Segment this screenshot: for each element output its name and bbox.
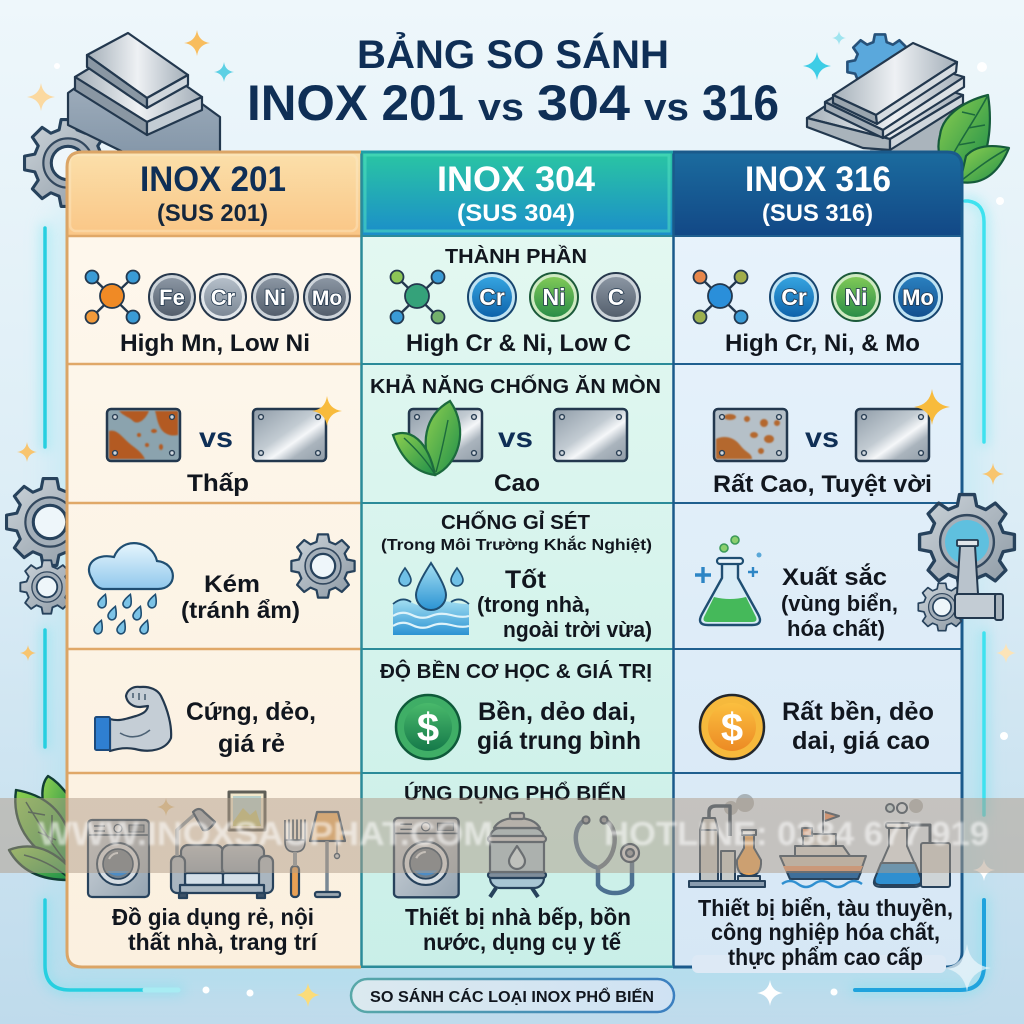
applications text xyxy=(405,904,631,955)
row heading: rust resistance: CHỐNG GỈ SÉT xyxy=(441,510,590,534)
comparison table xyxy=(66,151,963,968)
title: vs xyxy=(478,87,524,129)
elements: Cr Ni Mo: Ni xyxy=(844,284,868,310)
elements: Cr Ni C: C xyxy=(608,284,624,310)
decoration: top-right gear, ingots and leaves xyxy=(807,34,1009,183)
strength text: Bền, dẻo dai, xyxy=(478,698,636,726)
applications text backing and lines: công nghiệp hóa chất, xyxy=(711,919,940,945)
rust rating: Kém xyxy=(204,571,260,598)
row heading: strength and value: ĐỘ BỀN CƠ HỌC & GIÁ TRỊ xyxy=(380,659,652,683)
elements: Fe Cr Ni Mo: Cr xyxy=(211,285,236,310)
corrosion rating: Cao xyxy=(494,470,540,497)
title: vs xyxy=(644,87,689,129)
strength text: giá trung bình xyxy=(477,727,641,755)
icon: green dollar coin xyxy=(396,695,460,759)
row heading: common applications: ỨNG DỤNG PHỔ BIẾN xyxy=(404,781,626,805)
rust rating: (tránh ẩm) xyxy=(181,597,300,623)
strength text xyxy=(477,698,641,755)
composition text: High Cr, Ni, & Mo xyxy=(725,330,920,357)
corner sparkle bottom-right xyxy=(943,944,991,992)
title xyxy=(247,31,779,131)
header: INOX 304 xyxy=(437,160,596,227)
elements: Cr Ni C: Cr xyxy=(479,284,505,310)
strength text: dai, giá cao xyxy=(792,727,930,755)
icon: green dollar coin: $ xyxy=(417,706,439,750)
elements: Cr Ni Mo: Mo xyxy=(902,285,934,310)
header: INOX 316: (SUS 316) xyxy=(762,200,873,227)
rust rating xyxy=(781,563,898,641)
icon: molecule xyxy=(86,270,140,324)
applications text: Thiết bị nhà bếp, bồn xyxy=(405,904,631,930)
applications text backing and lines: Thiết bị biển, tàu thuyền, xyxy=(698,895,953,921)
title: INOX 201 xyxy=(247,75,464,131)
strength text xyxy=(782,698,934,755)
icon: orange dollar coin: $ xyxy=(721,706,743,750)
neon frame behind the table xyxy=(45,201,984,990)
applications text backing and lines xyxy=(692,895,953,973)
strength text: giá rẻ xyxy=(218,730,285,758)
watermark band: HOTLINE: 0384 677 919 xyxy=(604,815,989,852)
header: INOX 304: (SUS 304) xyxy=(457,200,575,227)
applications text: nước, dụng cụ y tế xyxy=(423,929,621,955)
icon: rusted plate vs polished plate: vs xyxy=(199,422,233,453)
header: INOX 201: INOX 201 xyxy=(140,160,286,199)
title: BẢNG SO SÁNH xyxy=(357,31,669,77)
icon: water drops and waves xyxy=(393,563,469,635)
icon: leaf on plate vs polished plate xyxy=(393,401,627,475)
watermark band xyxy=(0,798,1024,873)
decoration: left side gears xyxy=(7,479,93,614)
decoration: gears and pipe on right edge xyxy=(918,495,1014,631)
header: INOX 316 xyxy=(745,160,891,227)
rust rating: (trong nhà, xyxy=(477,592,590,617)
elements: Cr Ni C: Ni xyxy=(542,284,566,310)
corrosion rating: Rất Cao, Tuyệt vời xyxy=(713,471,932,498)
strength text xyxy=(186,698,316,758)
icon: lightly rusted plate vs polished plate xyxy=(714,389,950,461)
rust rating xyxy=(181,571,300,623)
column: INOX 316 xyxy=(689,160,953,973)
applications text xyxy=(112,904,319,955)
icon: orange dollar coin xyxy=(700,695,764,759)
column: INOX 304 xyxy=(370,160,661,955)
title: 304 xyxy=(537,75,630,131)
decoration: bottom-left leaves xyxy=(9,776,68,880)
composition text: High Mn, Low Ni xyxy=(120,330,310,357)
icon: flexed arm xyxy=(95,687,171,751)
header: INOX 304: INOX 304 xyxy=(437,160,596,199)
rust rating xyxy=(477,566,652,642)
rust rating: Xuất sắc xyxy=(782,563,887,591)
icon: gear xyxy=(291,534,355,598)
icon: lightly rusted plate vs polished plate: vs xyxy=(805,422,839,453)
rust rating: hóa chất) xyxy=(787,616,885,641)
row heading: composition: THÀNH PHẦN xyxy=(445,245,587,268)
decoration: top-left gear and steel ingots xyxy=(25,33,220,206)
elements: Fe Cr Ni Mo: Mo xyxy=(312,287,342,310)
row heading: corrosion resistance: KHẢ NĂNG CHỐNG ĂN MÒN xyxy=(370,374,661,398)
footer pill: SO SÁNH CÁC LOẠI INOX PHỔ BIẾN xyxy=(370,988,654,1006)
icon: leaf on plate vs polished plate: vs xyxy=(498,422,533,453)
icons: factory, ship, lab flask xyxy=(689,794,950,887)
header: INOX 201 xyxy=(140,160,286,227)
icon: molecule xyxy=(390,270,444,324)
header: INOX 201: (SUS 201) xyxy=(157,200,268,227)
strength text: Cứng, dẻo, xyxy=(186,698,316,726)
column: INOX 201 xyxy=(86,160,355,955)
elements: Fe Cr Ni Mo: Fe xyxy=(159,285,185,310)
row heading: rust resistance xyxy=(381,510,652,554)
rust rating: ngoài trời vừa) xyxy=(503,617,652,642)
composition text: High Cr & Ni, Low C xyxy=(406,330,631,357)
elements: Cr Ni Mo: Cr xyxy=(781,284,807,310)
applications text backing and lines: thực phẩm cao cấp xyxy=(728,944,923,970)
elements: Fe Cr Ni Mo: Ni xyxy=(264,285,286,310)
watermark band: WWW.INOXSAUPHAT.COM xyxy=(38,815,493,852)
icons: washer, water tank, stethoscope xyxy=(394,813,639,897)
rust rating: (vùng biển, xyxy=(781,591,898,616)
icons: washer, sofa, lamps, fork, picture xyxy=(88,792,345,898)
elements: Cr Ni C xyxy=(468,273,640,321)
icon: rusted plate vs polished plate xyxy=(107,396,342,461)
footer pill xyxy=(351,979,674,1012)
strength text: Rất bền, dẻo xyxy=(782,698,934,726)
rust rating: Tốt xyxy=(505,566,547,594)
header: INOX 316: INOX 316 xyxy=(745,160,891,199)
applications text: Đồ gia dụng rẻ, nội xyxy=(112,904,314,930)
applications text: thất nhà, trang trí xyxy=(128,929,319,955)
title: 316 xyxy=(702,75,779,131)
elements: Fe Cr Ni Mo xyxy=(149,274,350,320)
corrosion rating: Thấp xyxy=(187,470,249,497)
icon: chemical flask xyxy=(695,536,762,625)
row heading: rust resistance: (Trong Môi Trường Khắc Nghiệt) xyxy=(381,535,652,554)
icon: molecule xyxy=(694,270,748,324)
icon: rain cloud xyxy=(89,543,173,635)
elements: Cr Ni Mo xyxy=(770,273,942,321)
